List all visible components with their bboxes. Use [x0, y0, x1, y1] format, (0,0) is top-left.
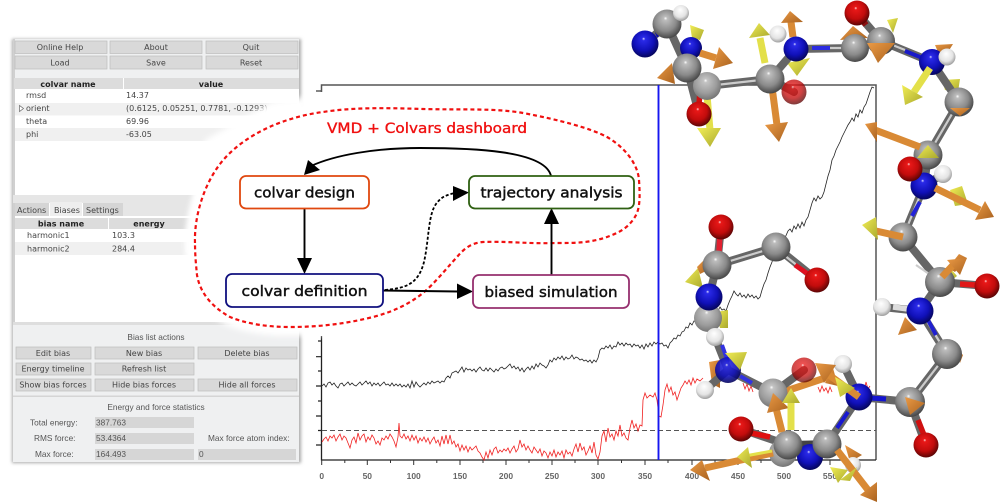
bias table: 103.3	[112, 231, 135, 240]
x axis labels	[319, 471, 837, 481]
energy and force statistics: RMS force:	[34, 433, 76, 443]
top buttons: Reset	[240, 58, 262, 68]
node: colvar definition	[226, 274, 383, 307]
atoms	[694, 214, 1000, 473]
colvar table: -63.05	[126, 130, 152, 139]
dotted arrow: definition to analysis	[385, 186, 469, 290]
bias actions panel: Hide bias forces	[112, 380, 176, 390]
top buttons: About	[144, 43, 168, 52]
colvar table: value	[199, 80, 224, 89]
top buttons	[15, 41, 298, 69]
top buttons: Quit	[243, 43, 259, 52]
bias table: bias name	[38, 220, 85, 228]
x axis labels: 50	[363, 471, 372, 481]
bias actions panel: Refresh list	[122, 364, 166, 374]
energy and force statistics	[30, 402, 296, 460]
node: biased simulation	[473, 275, 629, 308]
top buttons: Save	[146, 58, 166, 68]
top buttons: Load	[50, 58, 70, 68]
bias table: harmonic1	[27, 231, 70, 240]
bias actions panel	[13, 322, 299, 462]
colvar table: 69.96	[126, 117, 149, 126]
bonds	[645, 13, 959, 237]
bias actions panel: New bias	[126, 349, 162, 358]
tabs: Settings	[86, 206, 119, 215]
arrow: design to definition	[297, 208, 312, 274]
white halo behind workflow diagram	[186, 97, 640, 327]
blue time cursor	[658, 85, 660, 460]
chart: colvar and energy timeline	[316, 85, 876, 481]
molecule: lower helix with force arrows	[685, 214, 1000, 502]
bias actions panel: Show bias forces	[19, 380, 87, 390]
arrow: analysis back to design	[304, 148, 551, 176]
node: trajectory analysis: trajectory analysis	[480, 186, 622, 202]
bias table: energy	[133, 220, 166, 228]
x axis labels: 550	[823, 471, 837, 481]
arrow: definition to simulation	[383, 284, 473, 299]
energy and force statistics: Max force:	[35, 449, 74, 459]
force arrows in front of atoms	[690, 217, 967, 502]
arrow: simulation to analysis	[544, 208, 559, 275]
bias table	[15, 218, 299, 255]
x axis labels: 0	[319, 471, 324, 481]
force arrows in front of atoms	[700, 43, 994, 220]
black colvar trace	[322, 87, 874, 388]
energy and force statistics: 53.4364	[96, 433, 126, 443]
node: colvar design	[240, 176, 369, 208]
dashboard title: VMD + Colvars dashboard	[327, 121, 527, 137]
workflow diagram	[195, 108, 640, 327]
x axis labels: 200	[499, 471, 513, 481]
x axis labels: 100	[407, 471, 421, 481]
red energy trace	[322, 378, 870, 460]
node: colvar design: colvar design	[254, 186, 355, 202]
bias actions panel: Bias list actions	[127, 332, 185, 342]
energy and force statistics: 0	[199, 449, 204, 459]
node: trajectory analysis	[469, 176, 634, 208]
x axis labels: 150	[453, 471, 467, 481]
energy and force statistics: Energy and force statistics	[107, 402, 205, 412]
dashed threshold line	[322, 430, 876, 432]
colvar table: orient	[26, 104, 50, 113]
energy and force statistics: Max force atom index:	[208, 433, 290, 443]
tabs: Actions	[17, 206, 46, 215]
colvar table: rmsd	[26, 91, 46, 100]
colvar table: 14.37	[126, 91, 149, 100]
energy and force statistics: 164.493	[96, 449, 126, 459]
molecule: upper helix with force arrows	[632, 0, 994, 237]
x axis labels: 350	[638, 471, 652, 481]
node: biased simulation: biased simulation	[484, 285, 618, 301]
x axis labels: 450	[731, 471, 745, 481]
x axis labels: 300	[591, 471, 605, 481]
red dashed dashboard outline	[195, 108, 640, 327]
plot frame	[316, 85, 876, 465]
bias actions panel: Energy timeline	[21, 364, 85, 374]
panel: colvars dashboard window	[12, 39, 301, 463]
energy and force statistics: 387.763	[96, 418, 126, 428]
x axis labels: 500	[777, 471, 791, 481]
atoms	[632, 0, 974, 200]
force arrows behind atoms	[685, 254, 967, 483]
colvar table: theta	[26, 117, 47, 126]
bias actions panel: Edit bias	[36, 349, 70, 358]
bias actions panel: Delete bias	[224, 349, 270, 358]
colvar table: (0.6125, 0.05251, 0.7781, -0.1293)	[126, 104, 267, 113]
bias actions panel: Hide all forces	[219, 380, 275, 390]
bias table: 284.4	[112, 244, 135, 254]
bias table: harmonic2	[27, 244, 70, 254]
force arrows behind atoms	[657, 11, 968, 206]
energy and force statistics: Total energy:	[30, 418, 78, 428]
x axis labels: 250	[545, 471, 559, 481]
colvar table	[14, 78, 299, 141]
tabs: Biases	[54, 206, 80, 215]
tabs	[13, 195, 299, 216]
node: colvar definition: colvar definition	[242, 284, 368, 300]
top buttons: Online Help	[37, 43, 83, 52]
x axis labels: 400	[685, 471, 699, 481]
colvar table: colvar name	[40, 80, 96, 89]
colvar table: phi	[26, 130, 38, 139]
bonds	[705, 227, 987, 445]
